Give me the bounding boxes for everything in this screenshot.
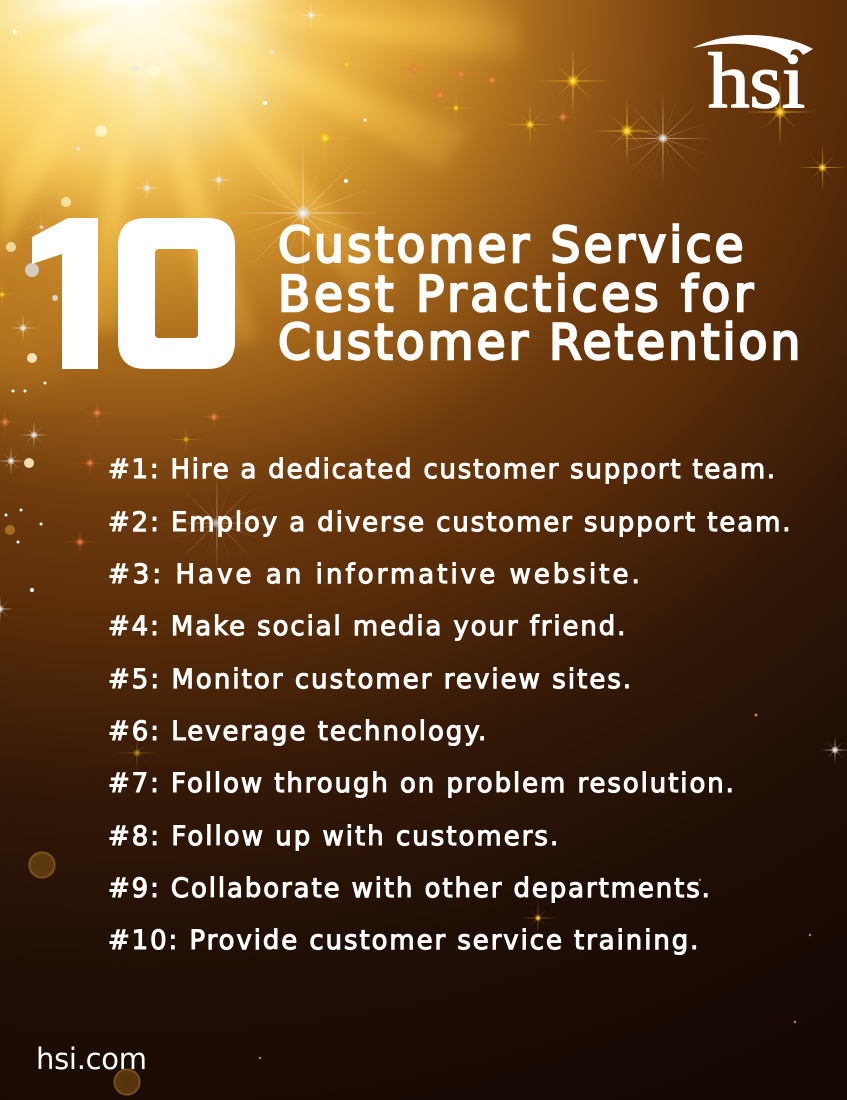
logo wordmark: hsi xyxy=(708,37,805,124)
title xyxy=(278,217,800,371)
list: ten best practices: #9: Collaborate with other departments. xyxy=(108,873,710,904)
list: ten best practices xyxy=(108,454,791,956)
list: ten best practices: #4: Make social media your friend. xyxy=(108,611,625,642)
title: Best Practices for xyxy=(278,266,753,323)
logo swoosh xyxy=(693,35,813,59)
big number 10: 1 xyxy=(20,177,138,414)
title: Customer Retention xyxy=(278,314,800,371)
logo: hsi xyxy=(693,35,813,124)
list: ten best practices: #5: Monitor customer review sites. xyxy=(108,664,631,695)
big number 10: 0 xyxy=(118,177,236,414)
list: ten best practices: #3: Have an informative website. xyxy=(108,559,640,590)
list: ten best practices: #10: Provide customer service training. xyxy=(108,925,698,956)
list: ten best practices: #1: Hire a dedicated customer support team. xyxy=(108,454,775,485)
list: ten best practices: #8: Follow up with customers. xyxy=(108,821,558,852)
list: ten best practices: #2: Employ a diverse customer support team. xyxy=(108,507,791,538)
big number 10 xyxy=(32,218,235,369)
title: Customer Service xyxy=(278,217,744,274)
list: ten best practices: #7: Follow through on problem resolution. xyxy=(108,768,734,799)
footer url: hsi.com xyxy=(36,1042,147,1076)
list: ten best practices: #6: Leverage technology. xyxy=(108,716,486,747)
